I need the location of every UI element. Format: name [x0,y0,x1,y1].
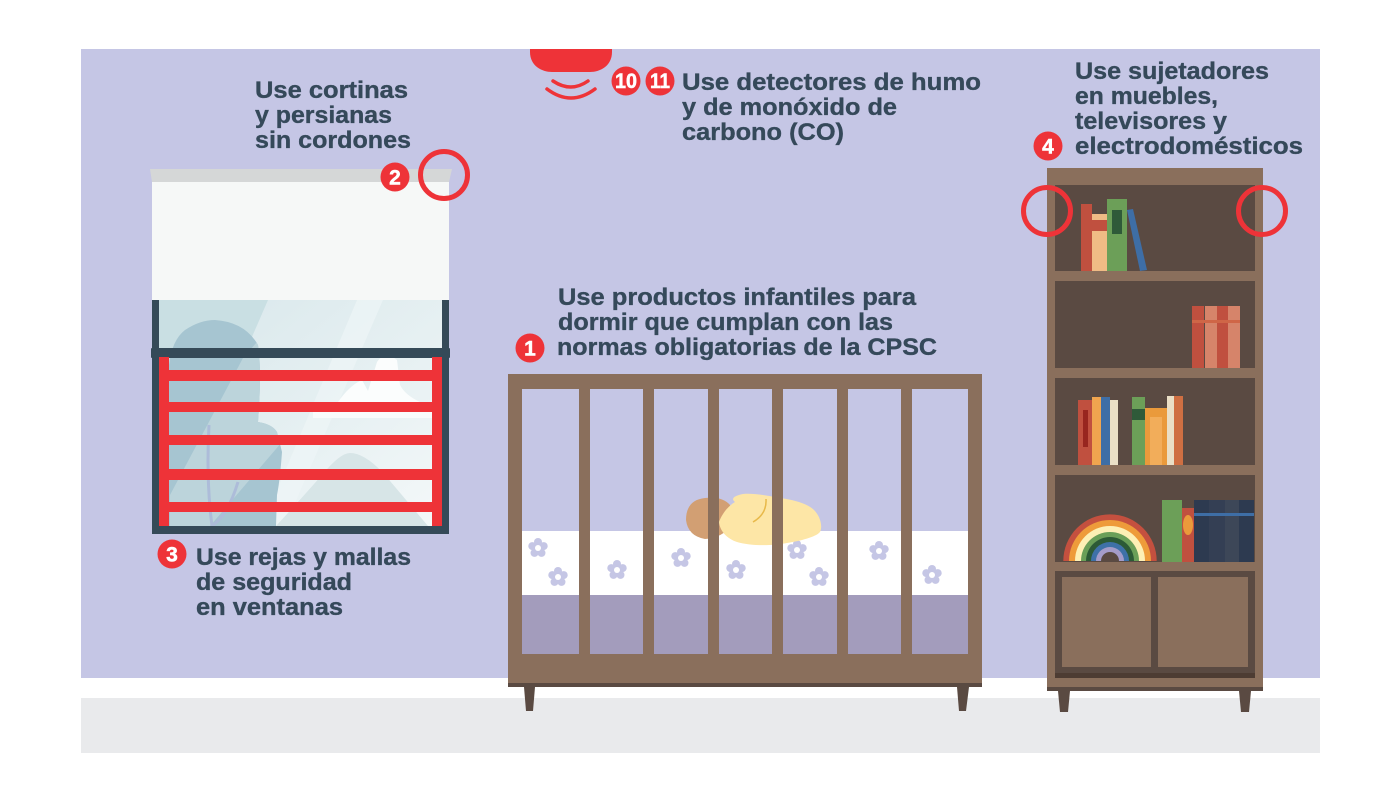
heading: infant sleep products: Use productos infantiles para [558,284,917,311]
books: second shelf [1192,306,1240,368]
heading: window guards: en ventanas [196,594,343,621]
heading: furniture anchors: electrodomésticos [1075,133,1303,160]
badge 11: 11 [650,70,670,93]
roller blind [152,182,449,300]
cabinet shadow strip [1055,673,1255,678]
shelf base [1047,687,1263,691]
heading: detectors: y de monóxido de [682,94,897,121]
shelf back panel [1055,185,1255,678]
badge 4: 4 [1042,136,1054,158]
heading: infant sleep products: dormir que cumplan con las [558,309,893,336]
heading: furniture anchors: televisores y [1075,108,1228,135]
crib [508,374,982,711]
red highlight circle: right anchor [1238,188,1286,234]
badge 4 [1034,132,1062,160]
badge 3 [158,540,186,568]
heading: window guards: Use rejas y mallas [196,544,411,571]
mattress [522,531,968,595]
icon: smoke and CO detector [530,49,612,98]
flower pattern [528,538,942,586]
shelf boards [1047,271,1263,571]
red security bars [159,357,442,526]
wall background [81,49,1320,678]
badge 10 [612,66,640,96]
books: fourth shelf [1162,500,1254,562]
heading: cordless blinds: Use cortinas [255,77,408,104]
badge 1 [516,334,544,362]
bookshelf [1047,168,1263,712]
crib legs [524,687,969,711]
crib frame and slats [508,374,982,683]
heading: window guards: de seguridad [196,569,352,596]
heading: infant sleep products: normas obligatorias de la CPSC [557,334,937,361]
shelf legs [1058,691,1251,712]
shelf body [1047,168,1263,687]
badge 2: 2 [389,166,401,190]
books: top shelf [1081,199,1147,271]
badge 3: 3 [166,544,178,566]
badge 11 [646,66,674,96]
badge 1: 1 [524,338,536,360]
heading: cordless blinds: sin cordones [255,127,411,154]
window with roller blind and security bars [150,169,452,534]
red highlight circle: left anchor [1024,188,1070,234]
heading: furniture anchors: Use sujetadores [1075,58,1269,85]
heading: furniture anchors: en muebles, [1075,83,1218,110]
sleeping baby [686,494,821,545]
heading: cordless blinds: y persianas [255,102,392,129]
mattress base [522,595,968,654]
window view: glass and outdoor scene [159,300,442,526]
crib bottom rail shadow [508,683,982,687]
floor [81,698,1320,753]
badge 10: 10 [615,70,637,93]
blind header bar [150,169,452,182]
cabinet doors [1062,577,1248,667]
heading: detectors: carbono (CO) [682,119,844,146]
heading: detectors: Use detectores de humo [682,69,981,96]
window frame [151,300,450,534]
red highlight circle: blind corner [420,152,468,198]
toy rainbow [1063,514,1157,561]
books: third shelf [1078,396,1183,465]
badge 2 [380,162,410,192]
